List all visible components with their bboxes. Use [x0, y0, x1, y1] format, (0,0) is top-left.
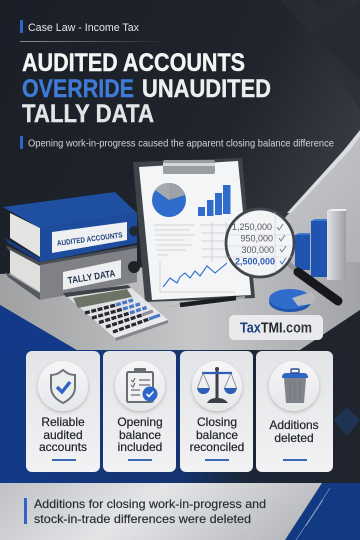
magnified figures: 300,000 — [241, 245, 274, 255]
label: case law: Case Law - Income Tax — [28, 22, 139, 34]
magnified figures — [232, 222, 275, 266]
binder label text: AUDITED ACCOUNTS — [56, 230, 123, 248]
conclusion text: Additions for closing work-in-progress and — [34, 497, 266, 511]
card text: Opening — [117, 415, 163, 429]
magnified figures: 2,500,000 — [235, 256, 275, 266]
subtitle: Opening work-in-progress caused the apparent closing balance difference — [28, 138, 334, 150]
card text: accounts — [39, 440, 87, 454]
brand badge — [229, 315, 323, 340]
title: OVERRIDE — [22, 75, 134, 103]
clipboard with report — [133, 158, 255, 302]
card text: Reliable — [41, 415, 85, 429]
binder label text: TALLY DATA — [67, 268, 116, 287]
bottom band — [0, 483, 360, 540]
card: closing balance reconciled — [180, 351, 253, 472]
conclusion text — [24, 497, 266, 526]
card text: Closing — [197, 415, 237, 429]
icon: scales — [197, 367, 237, 403]
small pie model — [269, 289, 315, 312]
card: reliable audited accounts — [26, 351, 100, 472]
corner accent — [285, 483, 360, 540]
card text: included — [118, 440, 162, 454]
background — [0, 0, 360, 350]
magnifying glass — [226, 209, 338, 301]
pen — [165, 297, 245, 307]
pie chart on report — [152, 183, 186, 217]
card text: balance — [119, 428, 161, 442]
magnified figures: 1,250,000 — [232, 222, 272, 232]
bar chart on report — [198, 185, 230, 216]
icon: shield — [51, 370, 75, 403]
title: AUDITED ACCOUNTS — [22, 49, 245, 77]
card text: balance — [196, 428, 238, 442]
conclusion text: stock-in-trade differences were deleted — [34, 512, 251, 526]
card text: reconciled — [190, 440, 244, 454]
calculator — [63, 285, 168, 341]
title: TALLY DATA — [22, 100, 154, 128]
icon: trash bin — [282, 369, 308, 403]
card: additions deleted — [256, 351, 333, 472]
binder: audited accounts — [3, 192, 139, 262]
magnified figures: 950,000 — [240, 234, 273, 244]
binder: tally data — [5, 245, 140, 300]
card text: deleted — [274, 431, 314, 445]
3d bar chart — [295, 209, 346, 280]
line chart on report — [163, 263, 227, 287]
desk surface — [0, 130, 360, 352]
card: opening balance included — [103, 351, 176, 472]
brand badge: TaxTMI.com — [240, 320, 312, 336]
icon: clipboard check — [127, 368, 158, 402]
card text: audited — [43, 428, 83, 442]
title: UNAUDITED — [142, 75, 271, 103]
lower backdrop — [0, 310, 360, 483]
title — [22, 49, 271, 128]
card text: Additions — [269, 418, 319, 432]
